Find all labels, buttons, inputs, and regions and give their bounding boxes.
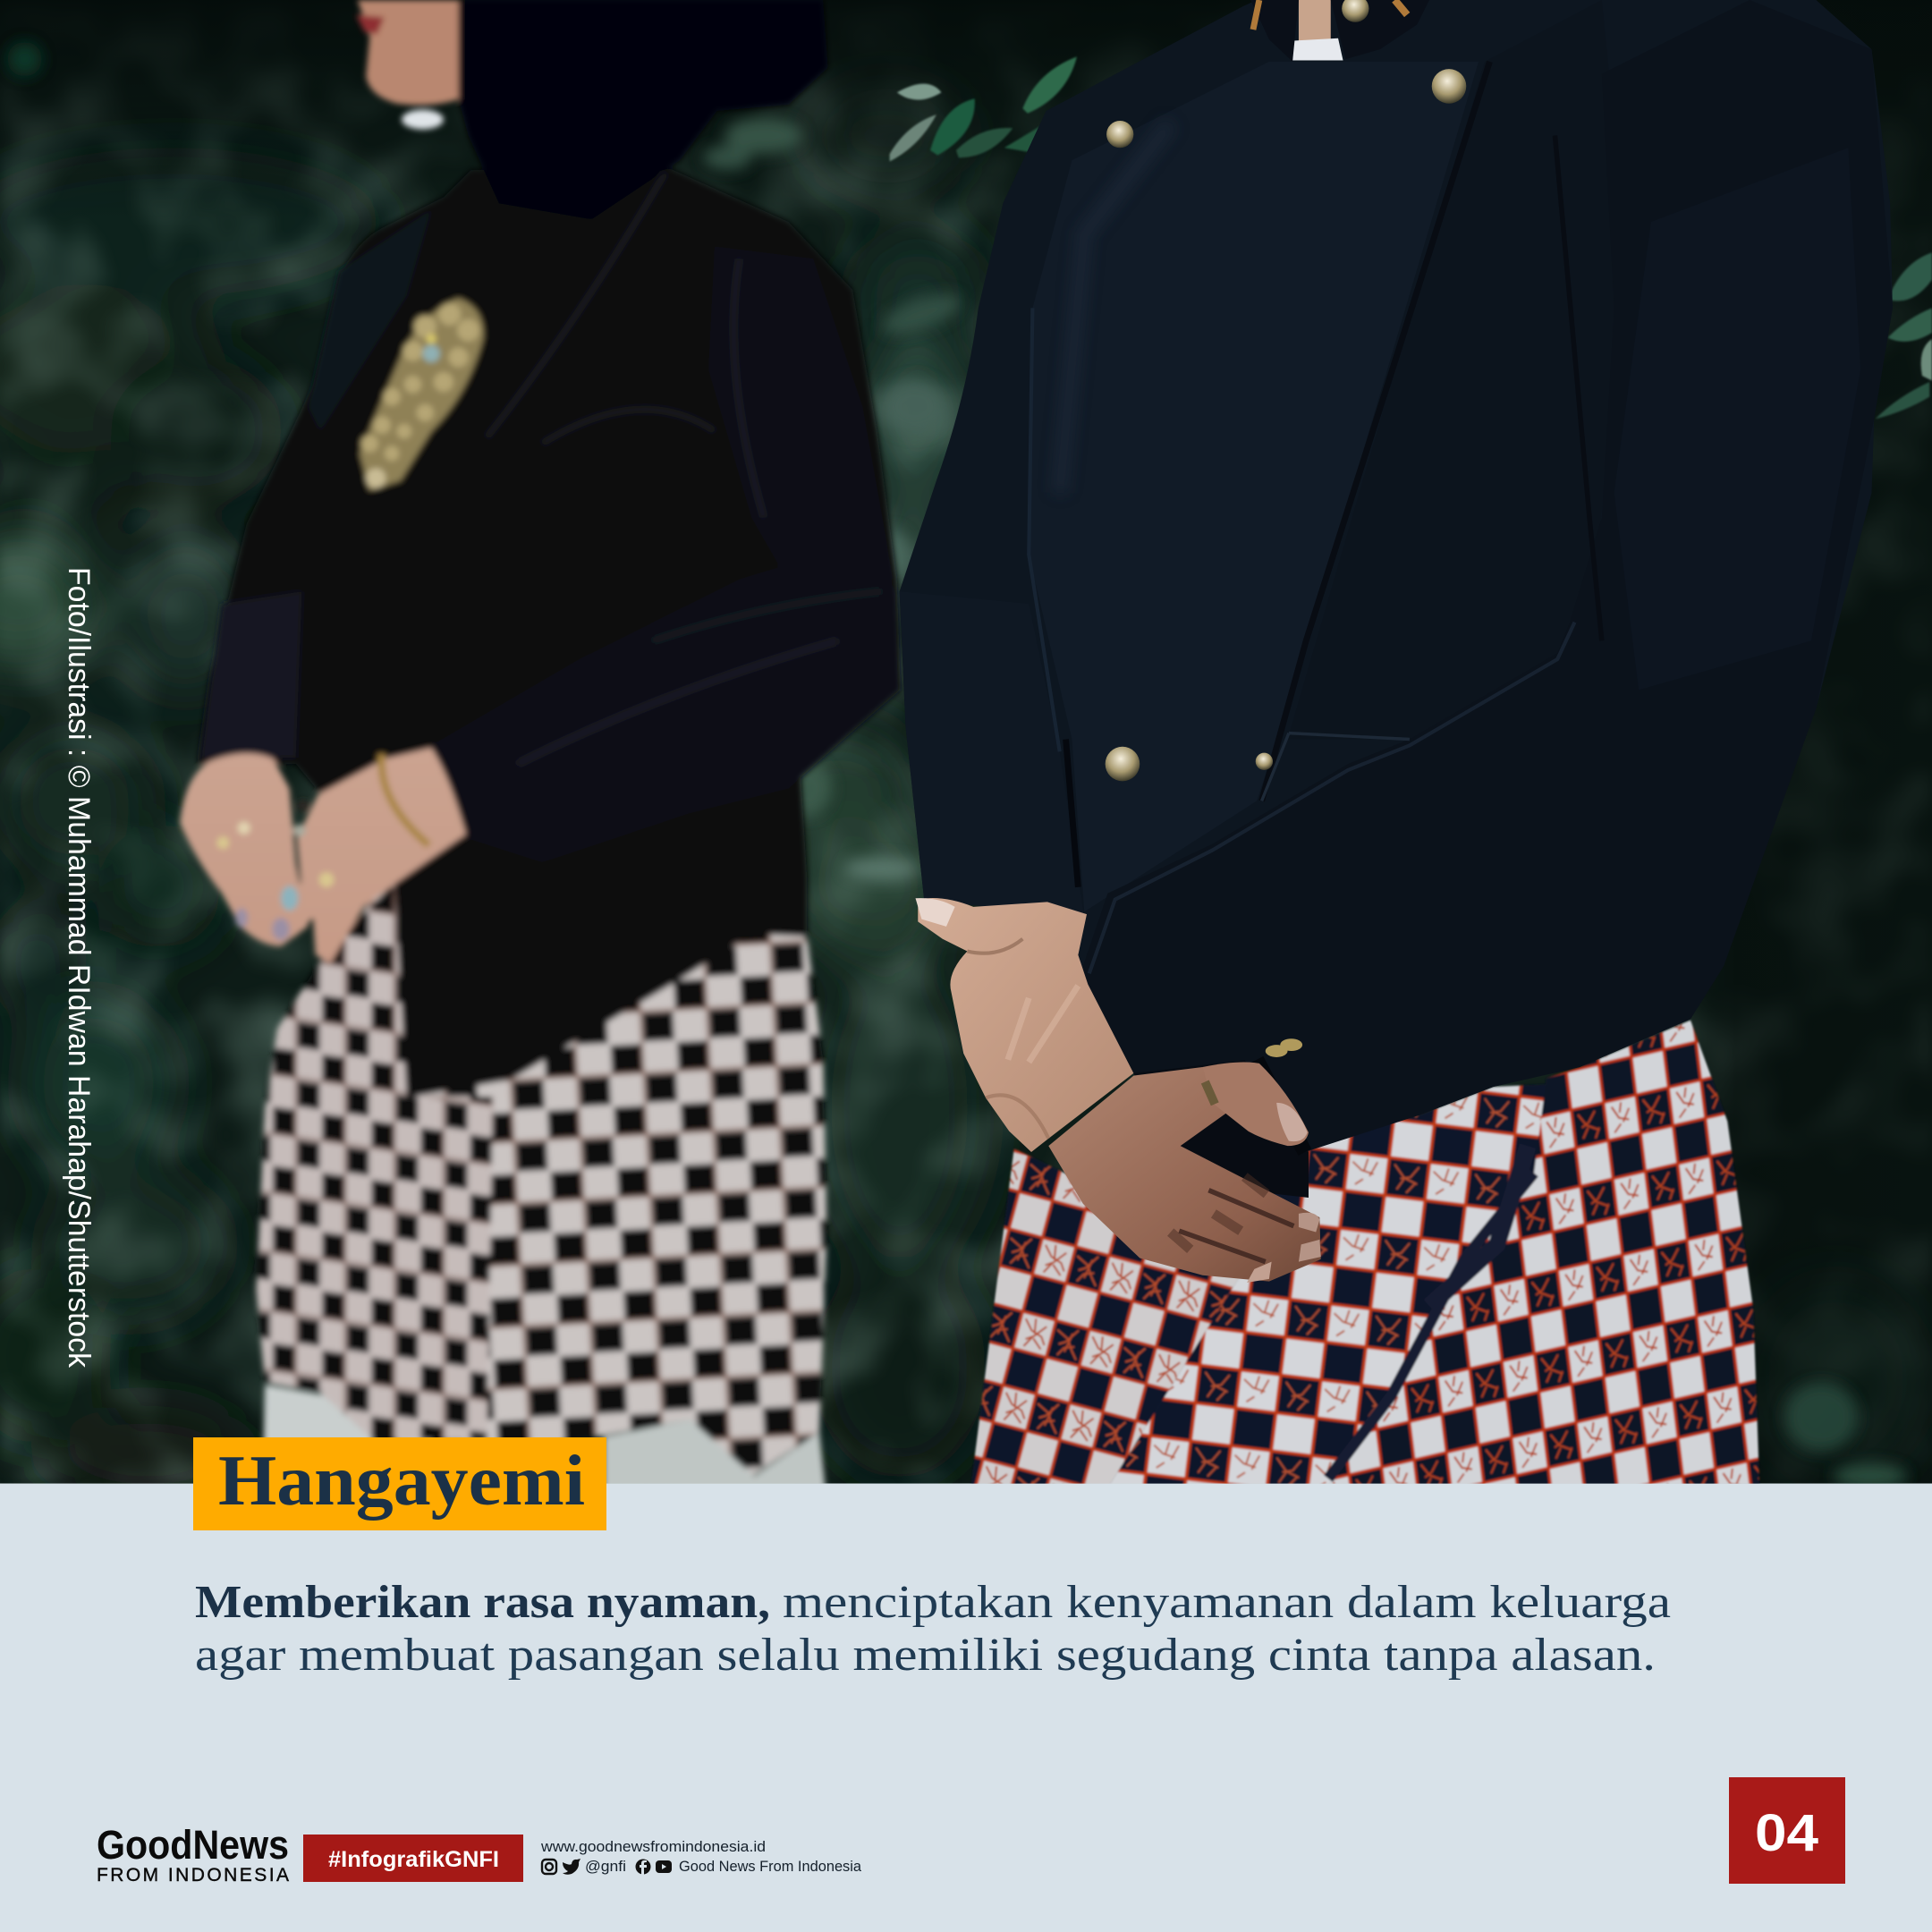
icon: youtube (656, 1860, 672, 1873)
woman: white underskirt (258, 1379, 379, 1437)
logo: GoodNews From Indonesia (97, 1822, 289, 1885)
man: left arm (900, 591, 1084, 918)
photo credit: Foto/Ilustrasi : © Muhammad RIdwan Harahap/Shutterstock (62, 567, 96, 1368)
logo: GoodNews From Indonesia: FROM INDONESIA (97, 1865, 289, 1885)
social links: @gnfi (585, 1858, 626, 1875)
logo: GoodNews From Indonesia: GoodNews (97, 1822, 289, 1868)
man: upper hand (916, 898, 1133, 1152)
woman: face (357, 0, 462, 106)
woman: brooch (360, 298, 483, 490)
photo: couple in Javanese dress (0, 0, 1932, 1504)
body text: agar membuat pasangan selalu memiliki segudang cinta tanpa alasan. (195, 1630, 1656, 1681)
social links: www.goodnewsfromindonesia.id (540, 1838, 766, 1855)
body text (195, 1577, 1671, 1681)
body text: Memberikan rasa nyaman, (195, 1577, 770, 1628)
page number (1729, 1777, 1845, 1884)
page number: 04 (1755, 1804, 1818, 1862)
man: jacket front panel (1029, 62, 1479, 911)
hashtag badge: #InfografikGNFI (328, 1847, 499, 1872)
icon: facebook (635, 1859, 651, 1875)
woman: hands (180, 748, 466, 963)
man: arm sleeve right (1083, 0, 1893, 1152)
man: buttons (1106, 0, 1466, 1057)
woman: collar (402, 110, 444, 130)
man: jacket (900, 0, 1893, 1152)
hashtag badge (303, 1835, 523, 1882)
foliage background (0, 0, 1932, 1504)
woman: skirt (257, 882, 826, 1476)
icon: twitter (563, 1859, 580, 1875)
social links (540, 1838, 862, 1875)
woman: hijab (458, 0, 828, 219)
leaves (890, 56, 1932, 419)
man: jacket hem behind hand (1133, 1057, 1309, 1198)
man: lapel fold (1262, 62, 1489, 801)
icon: instagram (542, 1860, 556, 1874)
woman (out of focus) (180, 0, 901, 1491)
man: lower hand (1048, 1062, 1321, 1283)
bottom panel (0, 1484, 1932, 1932)
man (900, 0, 1893, 1486)
body text: menciptakan kenyamanan dalam keluarga (783, 1577, 1671, 1628)
social links: Good News From Indonesia (679, 1858, 862, 1875)
man: neck and shirt (1299, 0, 1331, 42)
woman: blouse (197, 166, 901, 1097)
title badge: Hangayemi (218, 1442, 585, 1521)
woman: sleeve sheen (431, 542, 900, 862)
man: sarong (971, 1021, 1759, 1486)
